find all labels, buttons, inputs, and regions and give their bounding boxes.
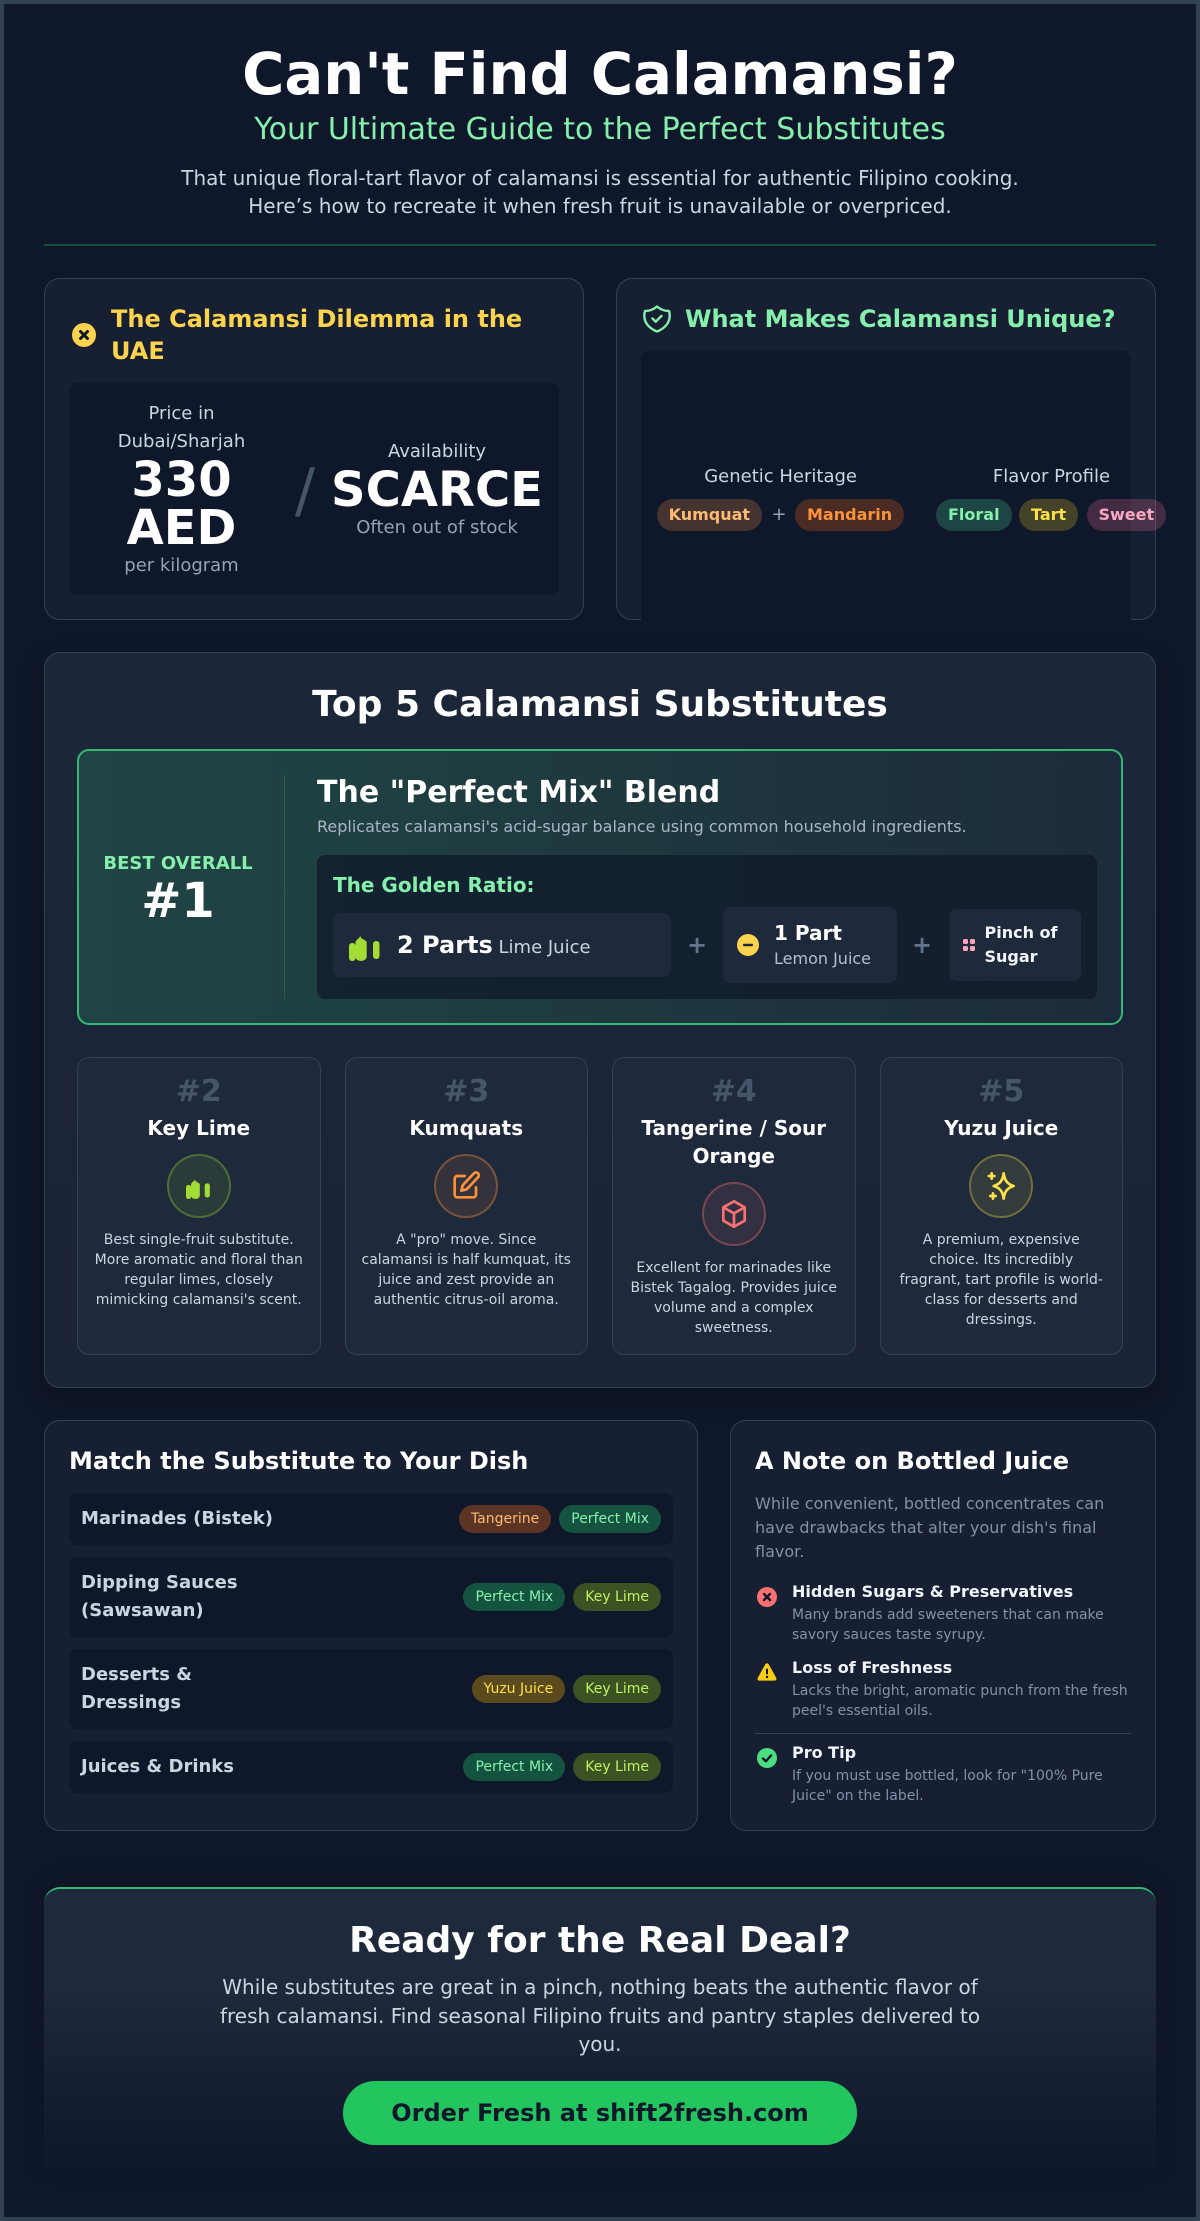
item text: Lacks the bright, aromatic punch from the fresh bbox=[792, 1683, 1128, 1699]
text: 1 Part bbox=[774, 921, 842, 945]
subtitle: Your Ultimate Guide to the Perfect Substitutes bbox=[254, 112, 946, 147]
item: hidden sugars: Hidden Sugars & Preservatives bbox=[792, 1582, 1073, 1601]
row: dipping sauces: (Sawsawan) bbox=[81, 1600, 204, 1621]
item text: Juice" on the label. bbox=[792, 1788, 924, 1804]
availability stat: SCARCE bbox=[331, 462, 543, 518]
card: tangerine bbox=[612, 1057, 856, 1355]
availability stat: Availability bbox=[388, 441, 486, 462]
panel: perfect mix bbox=[77, 749, 1123, 1025]
ingredient: sugar bbox=[949, 909, 1081, 981]
chip: tart: Tart bbox=[1031, 505, 1066, 524]
heading: Match the Substitute to Your Dish bbox=[69, 1447, 528, 1475]
plus: + bbox=[771, 504, 787, 525]
price stat: Price in bbox=[148, 403, 215, 424]
card: key lime: #2 bbox=[176, 1074, 222, 1109]
text: Pinch of bbox=[984, 923, 1058, 942]
heading: The Calamansi Dilemma in the bbox=[111, 305, 522, 333]
row: desserts: Dressings bbox=[81, 1692, 181, 1713]
text: fresh calamansi. Find seasonal Filipino fruits and pantry staples delivered to bbox=[220, 2004, 980, 2028]
chip: kumquat: Kumquat bbox=[669, 505, 750, 524]
price stat: per kilogram bbox=[124, 555, 239, 576]
price stat: Dubai/Sharjah bbox=[118, 431, 245, 452]
panel: top 5 substitutes bbox=[44, 652, 1156, 1388]
card: key lime: Best single-fruit substitute. bbox=[104, 1232, 294, 1248]
intro text bbox=[755, 1494, 1104, 1561]
plus: + bbox=[687, 931, 707, 959]
card: yuzu bbox=[880, 1057, 1123, 1355]
item text bbox=[791, 1768, 1103, 1804]
row: marinades: Perfect Mix bbox=[571, 1511, 649, 1527]
blend title: The "Perfect Mix" Blend bbox=[317, 775, 720, 810]
icon: shield check bbox=[643, 305, 671, 333]
row: dipping sauces: Dipping Sauces bbox=[81, 1572, 238, 1593]
text: Sugar bbox=[984, 947, 1038, 966]
intro text bbox=[181, 166, 1019, 218]
card: kumquats: authentic citrus-oil aroma. bbox=[374, 1292, 559, 1308]
row: desserts bbox=[69, 1649, 673, 1729]
plus: + bbox=[912, 931, 932, 959]
row: juices: Key Lime bbox=[585, 1759, 649, 1775]
row: marinades: Tangerine bbox=[471, 1511, 539, 1527]
heading: A Note on Bottled Juice bbox=[755, 1447, 1069, 1475]
card: key lime: More aromatic and floral than bbox=[95, 1252, 303, 1268]
icon: sparkles bbox=[969, 1154, 1033, 1218]
intro text: flavor. bbox=[755, 1542, 804, 1561]
sub text: Lemon Juice bbox=[774, 949, 871, 968]
card: tangerine: Orange bbox=[692, 1144, 775, 1168]
card: yuzu: fragrant, tart profile is world- bbox=[900, 1272, 1103, 1288]
chip: kumquat bbox=[657, 499, 762, 531]
card: key lime: mimicking calamansi's scent. bbox=[96, 1292, 302, 1308]
text bbox=[984, 923, 1058, 966]
availability stat bbox=[331, 441, 543, 538]
heritage and flavor box bbox=[641, 351, 1131, 643]
icon: pencil square bbox=[434, 1154, 498, 1218]
icon: key lime bbox=[167, 1154, 231, 1218]
availability stat: Often out of stock bbox=[356, 517, 518, 538]
card: yuzu: class for desserts and bbox=[925, 1292, 1078, 1308]
card: key lime: Key Lime bbox=[147, 1116, 250, 1140]
title: Can't Find Calamansi? bbox=[242, 41, 958, 108]
icon: warning bbox=[758, 1663, 776, 1681]
golden ratio heading: The Golden Ratio: bbox=[333, 873, 535, 897]
item text: peel's essential oils. bbox=[792, 1703, 933, 1719]
section heading: Top 5 Calamansi Substitutes bbox=[312, 684, 888, 725]
panel: match the substitute to your dish bbox=[44, 1420, 698, 1831]
chip: mandarin: Mandarin bbox=[807, 505, 892, 524]
card: yuzu: #5 bbox=[978, 1074, 1024, 1109]
chip: floral: Floral bbox=[948, 505, 1000, 524]
price stat: 330 bbox=[131, 452, 232, 508]
button bbox=[343, 2081, 857, 2145]
card: key lime: regular limes, closely bbox=[124, 1272, 273, 1288]
icon: x circle bbox=[757, 1587, 777, 1607]
intro text: While convenient, bottled concentrates can bbox=[755, 1494, 1104, 1513]
chip: sweet: Sweet bbox=[1098, 505, 1154, 524]
price stat: AED bbox=[127, 500, 236, 556]
card: key lime bbox=[77, 1057, 320, 1355]
row: desserts: Yuzu Juice bbox=[484, 1681, 553, 1697]
item text: If you must use bottled, look for "100% Pure bbox=[792, 1768, 1103, 1784]
icon: lime bbox=[349, 936, 380, 961]
header bbox=[44, 41, 1156, 246]
price and availability stats bbox=[69, 383, 559, 595]
label: BEST OVERALL bbox=[103, 853, 253, 874]
item: loss of freshness: Loss of Freshness bbox=[792, 1658, 952, 1677]
card: tangerine: Tangerine / Sour bbox=[641, 1116, 826, 1140]
panel: what makes calamansi unique bbox=[616, 278, 1156, 620]
card: tangerine: volume and a complex bbox=[654, 1300, 813, 1316]
chip: floral bbox=[936, 499, 1012, 531]
text bbox=[220, 1975, 980, 2056]
panel: the calamansi dilemma bbox=[44, 278, 584, 620]
row: dipping sauces: Perfect Mix bbox=[475, 1589, 553, 1605]
chip: sweet bbox=[1086, 499, 1166, 531]
icon: lemon bbox=[737, 934, 759, 956]
ingredient: lime bbox=[333, 913, 671, 977]
icon: cube bbox=[702, 1182, 766, 1246]
panel: call to action bbox=[44, 1887, 1156, 2171]
golden ratio box bbox=[317, 855, 1097, 999]
heading: UAE bbox=[111, 337, 165, 365]
card: yuzu: A premium, expensive bbox=[923, 1232, 1080, 1248]
text: you. bbox=[578, 2032, 622, 2056]
chip: mandarin bbox=[795, 499, 904, 531]
card: yuzu: dressings. bbox=[966, 1312, 1037, 1328]
panel: note on bottled juice bbox=[730, 1420, 1156, 1831]
item: pro tip: Pro Tip bbox=[792, 1743, 856, 1762]
text: While substitutes are great in a pinch, nothing beats the authentic flavor of bbox=[222, 1975, 978, 1999]
item text: Many brands add sweeteners that can make bbox=[792, 1607, 1104, 1623]
item text bbox=[792, 1683, 1128, 1719]
card: tangerine: sweetness. bbox=[695, 1320, 773, 1336]
intro text: have drawbacks that alter your dish's final bbox=[755, 1518, 1096, 1537]
card: tangerine: #4 bbox=[711, 1074, 757, 1109]
price stat bbox=[118, 403, 245, 576]
row: dipping sauces: Key Lime bbox=[585, 1589, 649, 1605]
card: kumquats: calamansi is half kumquat, its bbox=[362, 1252, 571, 1268]
row: dipping sauces bbox=[69, 1557, 673, 1637]
icon: check circle bbox=[757, 1748, 777, 1768]
card: kumquats: Kumquats bbox=[409, 1116, 523, 1140]
card: tangerine: Bistek Tagalog. Provides juice bbox=[630, 1280, 837, 1296]
card: kumquats: A "pro" move. Since bbox=[396, 1232, 536, 1248]
rank: #1 bbox=[141, 873, 215, 929]
text: 2 Parts Lime Juice bbox=[397, 931, 591, 959]
dish rows bbox=[69, 1493, 673, 1793]
icon: x circle bbox=[72, 323, 96, 347]
row: marinades: Marinades (Bistek) bbox=[81, 1508, 273, 1529]
heading bbox=[111, 305, 522, 365]
intro text: Here’s how to recreate it when fresh fruit is unavailable or overpriced. bbox=[248, 194, 952, 218]
heading: Ready for the Real Deal? bbox=[349, 1920, 851, 1961]
card: yuzu: choice. Its incredibly bbox=[929, 1252, 1073, 1268]
card: kumquats bbox=[344, 1057, 588, 1355]
row: juices bbox=[69, 1741, 673, 1793]
label: flavor profile: Flavor Profile bbox=[993, 466, 1110, 487]
row: desserts: Desserts & bbox=[81, 1664, 192, 1685]
icon: sugar bbox=[963, 939, 975, 951]
chip: tart bbox=[1019, 499, 1078, 531]
row: desserts: Key Lime bbox=[585, 1681, 649, 1697]
card: yuzu: Yuzu Juice bbox=[944, 1116, 1058, 1140]
substitutes 2 to 5 bbox=[77, 1057, 1123, 1355]
button: Order Fresh at shift2fresh.com bbox=[391, 2099, 809, 2127]
row: marinades bbox=[69, 1493, 673, 1545]
row: juices: Perfect Mix bbox=[475, 1759, 553, 1775]
card: tangerine: Excellent for marinades like bbox=[636, 1260, 831, 1276]
intro text: That unique floral-tart flavor of calamansi is essential for authentic Filipino cooking. bbox=[181, 166, 1019, 190]
row: juices: Juices & Drinks bbox=[81, 1756, 234, 1777]
item text: savory sauces taste syrupy. bbox=[792, 1627, 986, 1643]
blend description: Replicates calamansi's acid-sugar balance using common household ingredients. bbox=[317, 817, 967, 836]
heading: What Makes Calamansi Unique? bbox=[685, 305, 1116, 333]
badge: best overall bbox=[103, 853, 253, 929]
card: kumquats: juice and zest provide an bbox=[378, 1272, 554, 1288]
card: kumquats: #3 bbox=[443, 1074, 489, 1109]
slash divider: / bbox=[295, 456, 315, 526]
label: genetic heritage: Genetic Heritage bbox=[704, 466, 857, 487]
ingredient: lemon bbox=[723, 907, 897, 983]
item text bbox=[792, 1607, 1104, 1643]
